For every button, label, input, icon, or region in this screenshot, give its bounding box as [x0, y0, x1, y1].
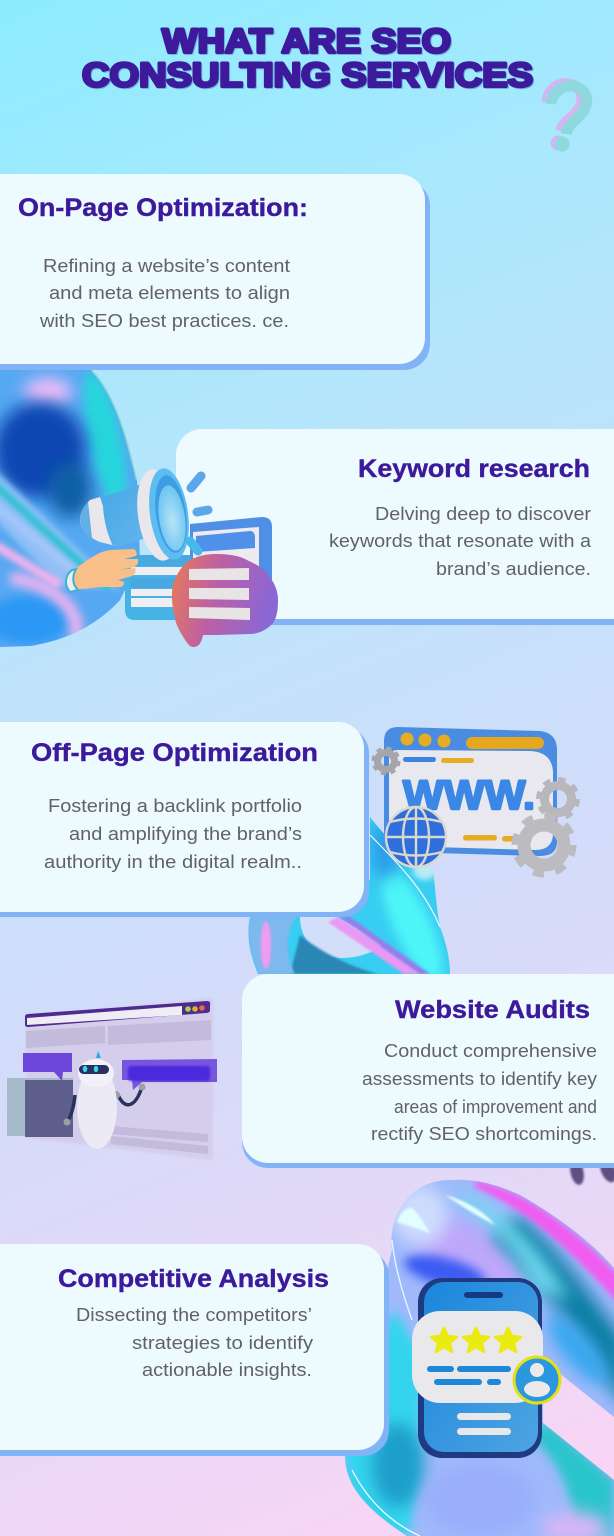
gear small [374, 748, 398, 774]
text: website audits description [362, 1040, 598, 1144]
decoration: iridescent ribbon bottom right [340, 1175, 614, 1536]
panel: competitive analysis [0, 1244, 389, 1456]
text: off-page description: and amplifying the brand’s [69, 823, 302, 844]
text: website audits description: areas of improvement and [394, 1096, 597, 1117]
text: off-page description [44, 795, 302, 872]
text: on-page description: Refining a website’s content [43, 255, 290, 276]
phone body [418, 1278, 542, 1458]
text: keyword description [329, 503, 592, 579]
text: website audits description: rectify SEO shortcomings. [371, 1123, 597, 1144]
heading: on-page optimization: On-Page Optimization: [18, 194, 308, 222]
review card [412, 1311, 543, 1403]
avatar [514, 1357, 560, 1403]
right speech bubble [122, 1059, 217, 1090]
icon: robot on browser window [7, 998, 217, 1160]
hand [66, 549, 138, 592]
heading: off-page optimization: Off-Page Optimization [31, 739, 318, 767]
text: off-page description: authority in the digital realm.. [44, 851, 302, 872]
heading: competitive analysis: Competitive Analysis [58, 1265, 329, 1293]
panel: off-page optimization [0, 722, 369, 917]
gear right [538, 780, 578, 818]
text: keyword description: Delving deep to discover [375, 503, 591, 524]
title: CONSULTING SERVICES [82, 56, 533, 94]
text: keyword description: keywords that resonate with a [329, 530, 592, 551]
decoration: iridescent ribbon middle [248, 817, 450, 974]
text: keyword description: brand’s audience. [436, 558, 591, 579]
speech bubble [172, 554, 278, 647]
sound ticks [190, 476, 208, 551]
icon: megaphone, hand, browser and speech bubble [66, 466, 278, 647]
icon: question mark [547, 84, 587, 152]
text: website audits description: Conduct comprehensive [384, 1040, 597, 1061]
text: competitive description: actionable insights. [142, 1359, 312, 1380]
heading: website audits: Website Audits [395, 996, 590, 1024]
text: on-page description: and meta elements to align [49, 282, 290, 303]
text: competitive description [76, 1304, 314, 1380]
megaphone [80, 466, 194, 563]
text: competitive description: Dissecting the competitors’ [76, 1304, 312, 1325]
dark square [7, 1078, 73, 1137]
icon: www browser with globe and gears [374, 727, 578, 874]
title [82, 22, 533, 94]
text: on-page description [39, 255, 290, 331]
browser window [384, 727, 557, 856]
robot [64, 1051, 146, 1149]
www text: WWW. [403, 772, 535, 818]
icon: phone with star review [412, 1278, 560, 1458]
text: website audits description: assessments to identify key [362, 1068, 598, 1089]
text: off-page description: Fostering a backlink portfolio [48, 795, 302, 816]
panel: website audits [242, 974, 614, 1168]
panel: on-page optimization [0, 174, 430, 370]
text: competitive description: strategies to identify [132, 1332, 314, 1353]
globe [386, 807, 446, 867]
browser panel [125, 517, 272, 620]
decoration: iridescent ribbon left [0, 368, 150, 650]
gear large [515, 816, 573, 874]
title: WHAT ARE SEO [162, 22, 451, 60]
stars [431, 1328, 521, 1352]
text: on-page description: with SEO best practices. ce. [39, 310, 289, 331]
heading: keyword research: Keyword research [358, 455, 590, 483]
left speech bubble [23, 1053, 72, 1081]
panel: keyword research [176, 429, 614, 625]
decoration: dark drips top right [568, 1155, 614, 1186]
